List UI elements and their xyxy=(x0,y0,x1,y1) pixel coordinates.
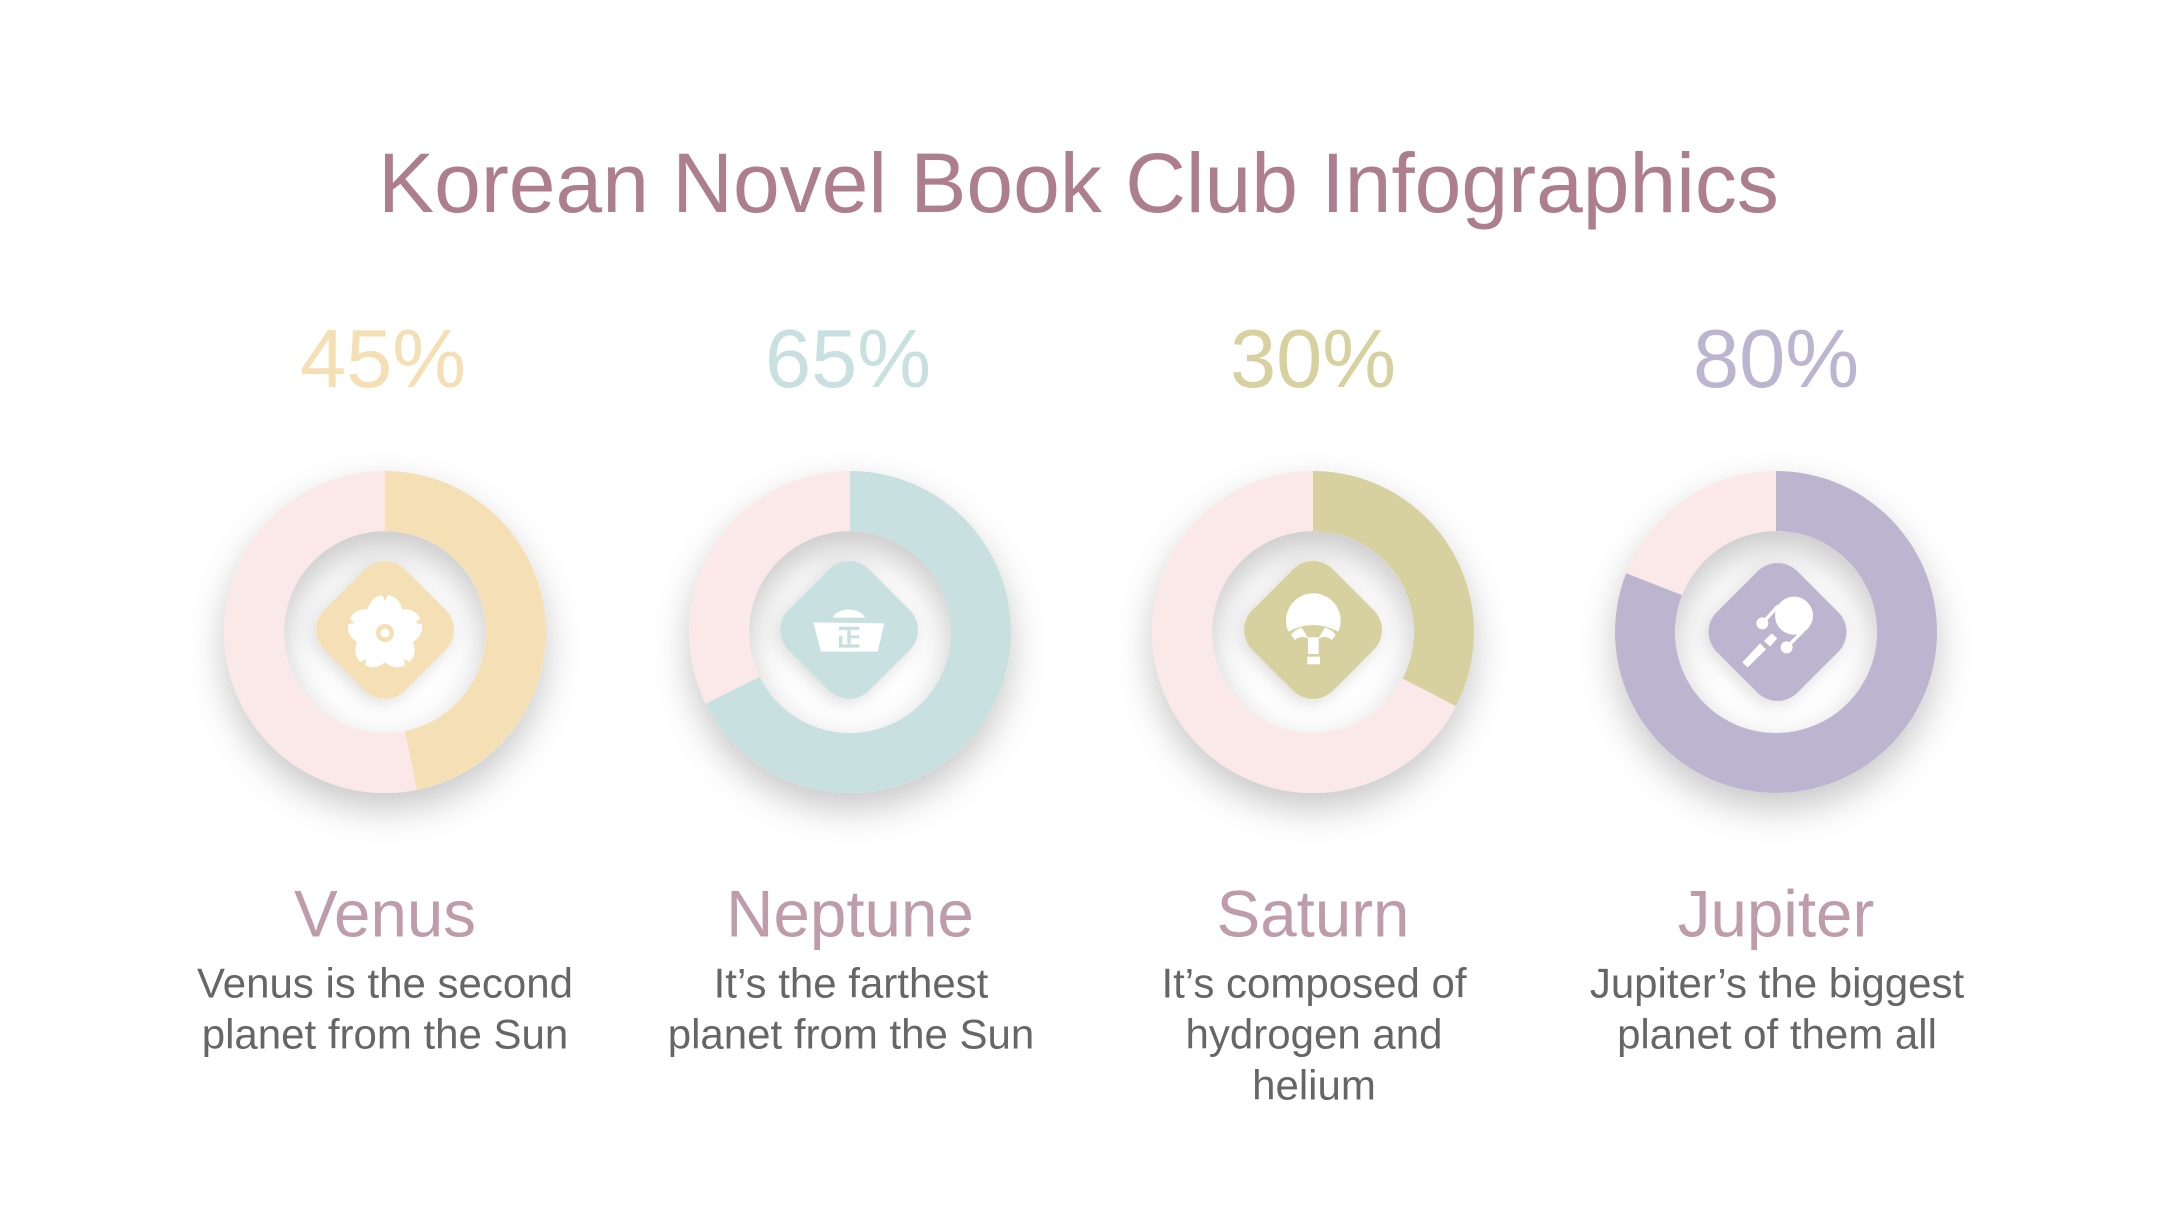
panel: Venus xyxy=(197,312,573,1058)
description: Saturn: It’s composed of xyxy=(1161,960,1467,1006)
donut chart: Jupiter xyxy=(1615,471,1937,793)
donut chart: Neptune xyxy=(689,471,1011,793)
panel: Saturn xyxy=(1152,312,1474,1108)
icon: fan xyxy=(1232,549,1394,711)
percentage: 65%: 65% xyxy=(765,312,931,405)
description: Jupiter: Jupiter’s the biggest xyxy=(1590,960,1965,1006)
donut chart: Saturn xyxy=(1152,471,1474,793)
icon: hat xyxy=(768,549,930,711)
description: Saturn: hydrogen and xyxy=(1186,1010,1442,1058)
label: Venus: Venus xyxy=(294,878,476,950)
title: Korean Novel Book Club Infographics xyxy=(378,136,1779,230)
description: Jupiter: planet of them all xyxy=(1617,1010,1937,1058)
label: Saturn: Saturn xyxy=(1217,878,1409,950)
description: Saturn: helium xyxy=(1252,1062,1376,1108)
panel: Jupiter xyxy=(1590,312,1965,1058)
panel: Neptune xyxy=(668,312,1034,1058)
label: Jupiter: Jupiter xyxy=(1678,878,1874,950)
percentage: 30%: 30% xyxy=(1230,312,1396,405)
percentage: 80%: 80% xyxy=(1693,312,1859,405)
description: Venus: Venus is the second xyxy=(197,960,573,1006)
percentage: 45%: 45% xyxy=(300,312,466,405)
label: Neptune: Neptune xyxy=(726,878,974,950)
donut chart: Venus xyxy=(224,471,546,793)
icon: paddle xyxy=(1697,551,1858,713)
icon: flower xyxy=(304,549,466,711)
description: Neptune: planet from the Sun xyxy=(668,1010,1034,1058)
description: Venus: planet from the Sun xyxy=(202,1010,568,1058)
description: Neptune: It’s the farthest xyxy=(714,960,989,1006)
